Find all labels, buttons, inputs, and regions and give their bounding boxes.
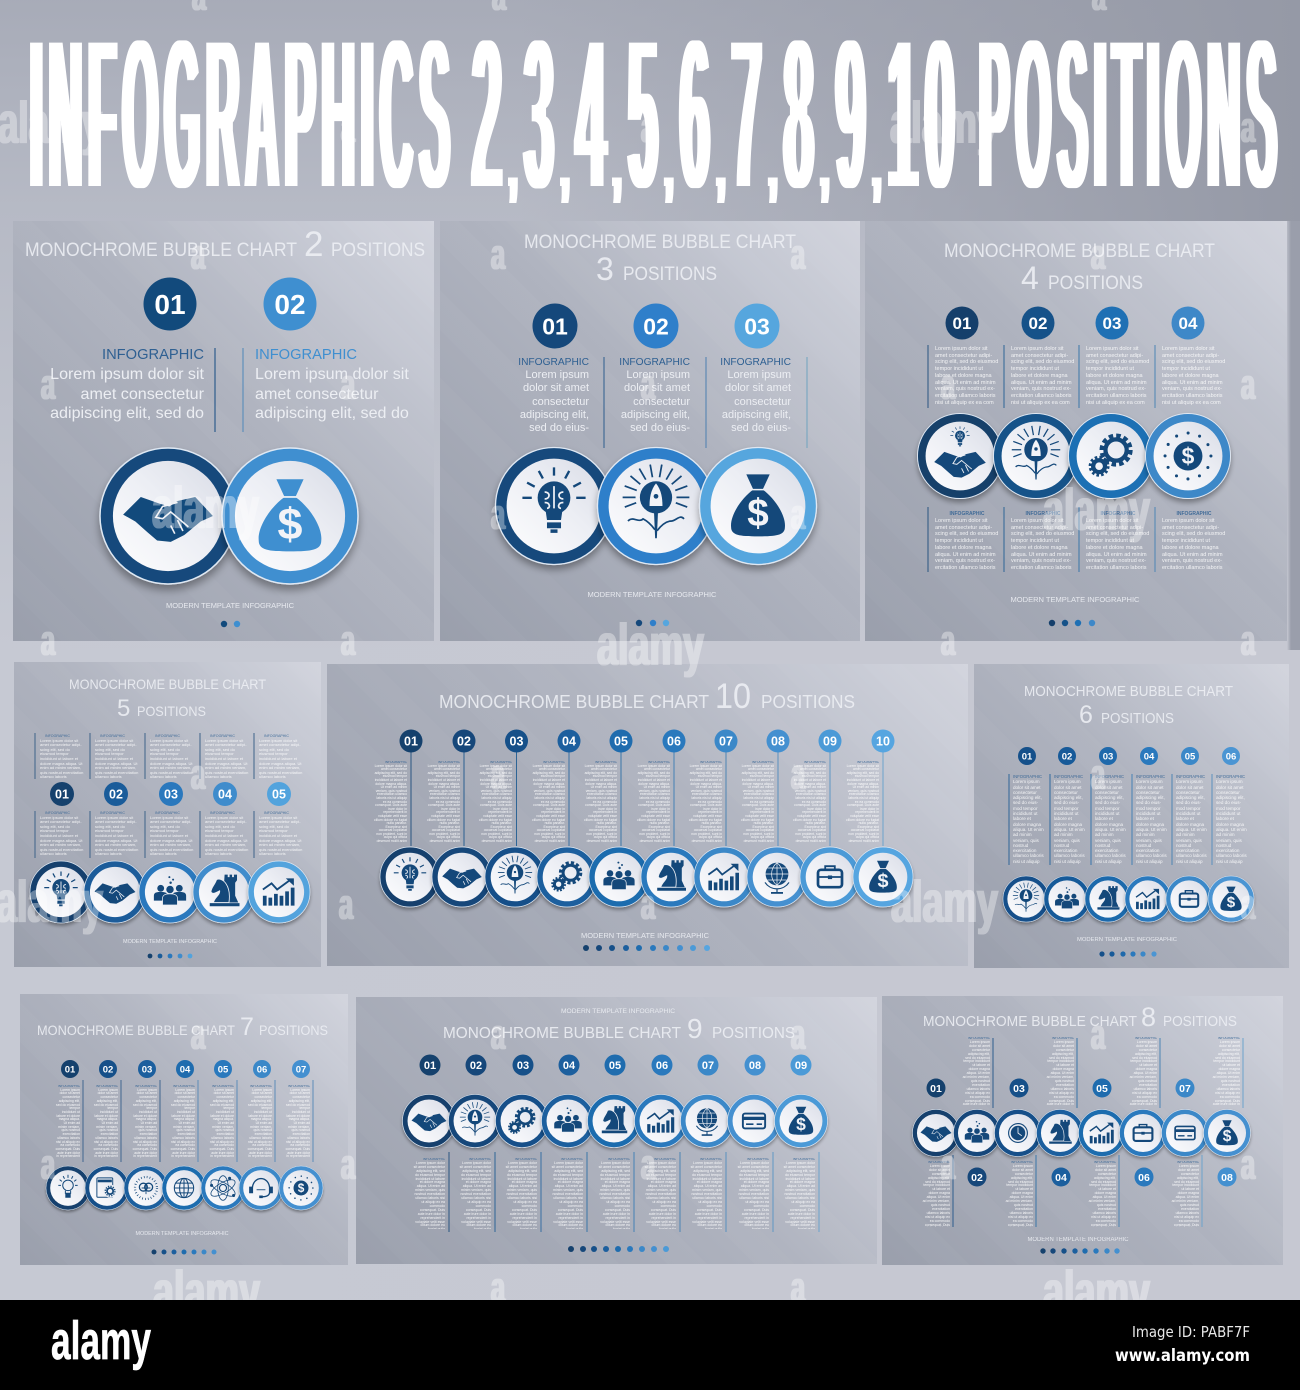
pagination dots — [1049, 620, 1095, 626]
footer caption: MODERN TEMPLATE INFOGRAPHIC — [1077, 937, 1177, 943]
number badges: 01 — [154, 289, 186, 320]
heading: MONOCHROME BUBBLE CHART — [25, 240, 297, 261]
heading — [923, 1002, 1237, 1032]
number badges: 03 — [1103, 314, 1121, 333]
watermarks: alamy — [152, 475, 259, 541]
watermarks: a — [491, 750, 505, 799]
number badges: 04 — [1179, 314, 1198, 333]
number badges: 04 — [218, 788, 232, 802]
text column 04: Lorem ipsum dolor sit amet consectetur adipiscing elit, sed do eiusmod tempor incididunt ut labore et dolore magna aliqua. Ut enim ad minim veniam, quis nostrud exercitation ullamco laboris nisi ut aliquip ex ea commodo consequat. Duis aute irure dolor in reprehenderit in voluptate velit esse cillum dolore eu fugiat nulla pariatur. Excepteur sint occaecat cupidatat non proident, sunt in culpa qui officia deserunt mollit anim — [532, 764, 565, 842]
number badges: 05 — [614, 734, 628, 748]
lower text 03: INFOGRAPHIC — [155, 811, 180, 815]
watermarks: a — [1241, 360, 1255, 409]
heading: 10 — [715, 677, 751, 716]
heading: POSITIONS — [761, 692, 855, 712]
text block 03 — [720, 357, 791, 434]
number badges: 02 — [103, 1064, 113, 1075]
number badges — [532, 304, 780, 348]
heading: POSITIONS — [331, 240, 425, 261]
number badges: 04 — [563, 1060, 576, 1072]
number badges: 01 — [542, 313, 568, 339]
heading: 3 — [596, 251, 614, 287]
text column 05: Lorem ipsum dolor sit amet consectetur adipiscing elit, sed do eiusmod tempor incididunt ut labore et dolore magna aliqua. Ut enim ad minim veniam, quis nostrud exercitation ullamco laboris nisi ut aliquip ex ea commodo consequat. Duis aute irure dolor in reprehenderit — [210, 1088, 234, 1158]
text block 02 — [619, 357, 690, 434]
bubbles — [100, 448, 358, 584]
watermarks: a — [1241, 103, 1255, 152]
footer caption: MODERN TEMPLATE INFOGRAPHIC — [1028, 1237, 1129, 1243]
number badges: 07 — [296, 1064, 306, 1075]
bubbles — [30, 861, 310, 923]
number badges: 01 — [1022, 751, 1033, 762]
lower text 01: INFOGRAPHIC — [45, 811, 70, 815]
text column 09: Lorem ipsum dolor sit amet consectetur adipiscing elit, sed do eiusmod tempor incididunt ut labore et dolore magna aliqua. Ut enim ad minim veniam, quis nostrud exercitation ullamco laboris nisi ut aliquip ex ea commodo consequat. Duis aute irure dolor in reprehenderit in voluptate velit esse cillum dolore eu fugiat nulla pariatur. Excepteur sint occaecat cupidatat non proident, sunt in culpa qui officia deserunt mollit anim — [793, 764, 826, 842]
text block 01: consectetur — [532, 396, 589, 408]
panel: 7 positions — [20, 994, 348, 1265]
watermarks: alamy — [0, 90, 102, 156]
image id: Image ID: PABF7F — [1132, 1323, 1250, 1341]
number badges: 02 — [457, 734, 471, 748]
bubbles — [380, 847, 913, 907]
text block 03: sed do eius- — [731, 422, 791, 434]
heading: 5 — [117, 695, 130, 722]
alamy logo: alamy — [51, 1311, 151, 1371]
text column 06: Lorem ipsum dolor sit amet consectetur adipiscing elit, sed do eiusmod tempor incididunt ut labore et dolore magna aliqua. Ut enim ad minim veniam, quis nostrud exercitation ullamco laboris nisi ut aliquip ex ea commodo consequat. Duis aute irure dolor in reprehenderit in voluptate velit esse cillum dolore eu fugiat nulla pariatur. Excepteur sint occaecat cupidatat non proident, sunt in culpa qui officia deserunt mollit anim — [637, 764, 670, 842]
heading — [1024, 684, 1233, 729]
footer caption: MODERN TEMPLATE INFOGRAPHIC — [1010, 595, 1140, 604]
text block 02 — [255, 347, 409, 422]
upper text 03: Lorem ipsum dolor sit amet consectetur adipi-scing elit, sed do eiusmod tempor incididunt ut labore et dolore magna aliqua. Ut enim ad minim veniam, quis nostrud ex-ercitation ullamco laboris nisi ut aliquip ex ea com — [1086, 346, 1149, 406]
text column 02: INFOGRAPHIC — [1054, 774, 1083, 779]
number badges: 01 — [55, 788, 69, 802]
number badges — [946, 306, 1204, 340]
heading: 7 — [240, 1013, 254, 1041]
text column 05: Lorem ipsum dolor sit amet consectetur adipiscing elit, sed do eiusmod tempor incididunt ut labore et dolore magna aliqua. Ut enim ad minim veniam, quis nostrud exercitation ullamco laboris nisi ut aliquip ex ea commodo consequat. Duis aute irure dolor in reprehenderit in voluptate velit esse cillum dolore eu fugiat nulla pariatur. Excepteur sint occaecat cupidatat non proident, sunt in culpa qui officia deserunt mollit anim — [584, 764, 617, 842]
watermarks: a — [191, 1010, 205, 1059]
heading: 4 — [1021, 260, 1039, 296]
heading: POSITIONS — [1048, 273, 1143, 294]
watermarks: a — [41, 616, 55, 665]
text block 01: adipiscing elit, sed do — [50, 404, 204, 422]
lower text 03: Lorem ipsum dolor sit amet consectetur adipi-scing elit, sed do eiusmod tempor incididunt ut labore et dolore magna aliqua. Ut enim ad minim veniam, quis nostrud ex-ercitation ullamco laboris — [1086, 518, 1149, 571]
watermarks: a — [941, 616, 955, 665]
number badges: 03 — [744, 313, 770, 339]
heading: POSITIONS — [1163, 1013, 1237, 1030]
number badges — [61, 1060, 310, 1078]
pagination dots — [568, 1246, 669, 1252]
number badges: 07 — [702, 1060, 714, 1072]
text block 03: adipiscing elit, — [722, 409, 791, 421]
watermarks: a — [791, 750, 805, 799]
bubbles — [496, 448, 816, 564]
number badges: 02 — [643, 313, 669, 339]
number badges: 08 — [749, 1060, 761, 1072]
upper text 01: INFOGRAPHIC — [45, 734, 70, 738]
heading: POSITIONS — [712, 1025, 795, 1042]
text block 01: sed do eius- — [529, 422, 589, 434]
pagination dots — [583, 945, 710, 951]
text column 05: INFOGRAPHIC — [1176, 774, 1205, 779]
panel: 4 positions — [865, 221, 1287, 641]
lower text 05: INFOGRAPHIC — [264, 811, 289, 815]
website: www.alamy.com — [1115, 1346, 1250, 1366]
number badges: 09 — [823, 734, 837, 748]
number badges: 02 — [971, 1172, 983, 1184]
footer caption: MODERN TEMPLATE INFOGRAPHIC — [561, 1008, 676, 1015]
text block 03: dolor sit amet — [725, 382, 791, 394]
text column 03: Lorem ipsum dolor sit amet consectetur adipiscing elit, sed do eiusmod tempor incididunt ut labore et dolore magna aliqua. Ut enim ad minim veniam, quis nostrud exercitation ullamco laboris nisi ut aliquip ex ea commodo consequat. Duis aute irure dolor in reprehenderit in voluptate velit esse cillum dolore eu fugiat nulla pariatur. Excepteur sint occaecat cupidatat non proident, sunt in culpa qui officia deserunt mollit anim — [479, 764, 512, 842]
watermarks: alamy — [890, 90, 998, 156]
heading: MONOCHROME BUBBLE CHART — [37, 1022, 235, 1038]
lower text 04: INFOGRAPHIC — [210, 811, 235, 815]
lower text 04: INFOGRAPHIC — [1176, 511, 1212, 517]
panel: 3 positions — [440, 221, 860, 641]
heading — [439, 677, 855, 716]
text block 02: consectetur — [633, 396, 690, 408]
number badges: 06 — [656, 1060, 668, 1072]
panel: 10 positions — [327, 664, 968, 966]
text column 06: INFOGRAPHIC — [1216, 774, 1245, 779]
pagination dots — [1099, 951, 1157, 957]
footer caption: MODERN TEMPLATE INFOGRAPHIC — [581, 933, 709, 940]
footer caption: MODERN TEMPLATE INFOGRAPHIC — [166, 601, 295, 610]
number badges — [144, 278, 316, 330]
text column 01: Lorem ipsum dolor sit amet consectetur adipiscing elit, sed do eiusmod tempor incididunt ut labore et dolore magna aliqua. Ut enim ad minim veniam, quis nostrud exercitation ullamco laboris nisi ut aliquip ex ea commodo consequat. Duis aute irure dolor in reprehenderit — [56, 1088, 80, 1158]
number badges: 02 — [1062, 751, 1072, 762]
lower text 01: Lorem ipsum dolor sit amet consectetur adipi-scing elit, sed do eiusmod tempor incididunt ut labore et dolore magna aliqua. Ut enim ad minim veniam, quis nostrud ex-ercitation ullamco laboris — [935, 518, 998, 571]
watermarks: alamy — [597, 612, 704, 678]
text column 08: Lorem ipsum dolor sit amet consectetur adipiscing elit, sed do eiusmod tempor incididunt ut labore et dolore magna aliqua. Ut enim ad minim veniam, quis nostrud exercitation ullamco laboris nisi ut aliquip ex ea commodo consequat. Duis aute irure dolor in reprehenderit in voluptate velit esse cillum dolore eu fugiat nulla pariatur. Excepteur sint occaecat cupidatat non proident, sunt in culpa qui officia deserunt mollit anim — [741, 764, 774, 842]
watermarks: a — [641, 360, 655, 409]
watermarks: a — [641, 880, 655, 929]
heading: POSITIONS — [137, 703, 206, 719]
text column 03: Lorem ipsum dolor sit amet consectetur adipiscing elit, sed do eiusmod tempor incididunt ut labore et dolore magna aliqua. Ut enim ad minim veniam, quis nostrud exercitation ullamco laboris nisi ut aliquip ex ea commodo consequat. Duis aute irure dolor in reprehenderit — [133, 1088, 157, 1158]
number badges: 06 — [257, 1064, 267, 1075]
text block 02: dolor sit amet — [624, 382, 690, 394]
watermarks: a — [1091, 750, 1105, 799]
watermarks: a — [41, 360, 55, 409]
pagination dots — [152, 1250, 216, 1254]
text column 04: Lorem ipsum dolor sit amet consectetur adipiscing elit, sed do eiusmod tempor incididunt ut labore et dolore magna aliqua. Ut enim ad minim veniam, quis nostrud exercitation ullamco laboris nisi ut aliquip ex ea commodo consequat. Duis aute irure dolor in reprehenderit — [171, 1088, 195, 1158]
heading — [25, 225, 425, 264]
number badges: 07 — [1179, 1083, 1191, 1095]
number badges: 04 — [180, 1064, 191, 1075]
heading: MONOCHROME BUBBLE CHART — [69, 676, 266, 692]
number badges: 01 — [930, 1083, 942, 1095]
pagination dots — [148, 954, 192, 958]
watermarks: a — [1241, 1140, 1255, 1189]
upper text 05: INFOGRAPHIC — [264, 734, 289, 738]
number badges: 03 — [142, 1064, 152, 1075]
text column 07: Lorem ipsum dolor sit amet consectetur adipiscing elit, sed do eiusmod tempor incididunt ut labore et dolore magna aliqua. Ut enim ad minim veniam, quis nostrud exercitation ullamco laboris nisi ut aliquip ex ea commodo consequat. Duis aute irure dolor in reprehenderit in voluptate velit esse cillum dolore eu fugiat nulla pariatur. Excepteur sint occaecat cupidatat non proident, sunt in culpa qui officia deserunt mollit anim — [689, 764, 722, 842]
watermarks: a — [941, 360, 955, 409]
text block 02: INFOGRAPHIC — [619, 357, 690, 368]
number badges: 05 — [272, 788, 286, 802]
text column 01: INFOGRAPHIC — [1013, 774, 1042, 779]
number badges: 01 — [953, 314, 971, 333]
text block 03: Lorem ipsum — [727, 369, 791, 381]
heading: MONOCHROME BUBBLE CHART — [439, 692, 709, 712]
watermarks: a — [1091, 230, 1105, 279]
text block 02: Lorem ipsum — [626, 369, 690, 381]
heading: MONOCHROME BUBBLE CHART — [443, 1025, 681, 1042]
watermarks: a — [1241, 616, 1255, 665]
watermarks: alamy — [0, 869, 103, 935]
panel: 6 positions — [974, 664, 1289, 968]
footer caption: MODERN TEMPLATE INFOGRAPHIC — [136, 1231, 228, 1237]
heading — [944, 241, 1215, 296]
heading — [443, 1013, 795, 1044]
number badges: 05 — [218, 1064, 229, 1075]
upper text 02: INFOGRAPHIC — [100, 734, 125, 738]
bubbles — [918, 414, 1230, 498]
number badges — [1018, 747, 1240, 765]
bubbles — [912, 1110, 1250, 1156]
lower text 01: INFOGRAPHIC — [950, 511, 984, 517]
watermarks: a — [341, 360, 355, 409]
lower text 02: Lorem ipsum dolor sit amet consectetur adipi-scing elit, sed do eiusmod tempor incididunt ut labore et dolore magna aliqua. Ut enim ad minim veniam, quis nostrud ex-ercitation ullamco laboris — [1011, 518, 1074, 571]
footer bar — [0, 1300, 1300, 1390]
heading: MONOCHROME BUBBLE CHART — [524, 232, 796, 253]
text block 01: INFOGRAPHIC — [518, 357, 589, 368]
text column 03: INFOGRAPHIC — [1095, 774, 1124, 779]
heading — [69, 676, 266, 722]
number badges: 02 — [470, 1060, 482, 1072]
number badges: 02 — [274, 289, 306, 320]
upper text 04: Lorem ipsum dolor sit amet consectetur adipi-scing elit, sed do eiusmod tempor incididunt ut labore et dolore magna aliqua. Ut enim ad minim veniam, quis nostrud ex-ercitation ullamco laboris nisi ut aliquip ex ea com — [1162, 346, 1225, 406]
heading — [524, 232, 796, 287]
number badges — [420, 1054, 812, 1076]
number badges: 04 — [1055, 1172, 1067, 1184]
text block 02: adipiscing elit, sed do — [255, 404, 409, 422]
text block 01 — [50, 347, 204, 422]
watermarks: a — [41, 1140, 55, 1189]
lower text 02: INFOGRAPHIC — [100, 811, 125, 815]
watermarks: a — [791, 230, 805, 279]
watermarks: a — [791, 1010, 805, 1059]
text block 01: Lorem ipsum — [525, 369, 589, 381]
number badges: 05 — [1096, 1083, 1108, 1095]
text block 03: consectetur — [734, 396, 791, 408]
number badges: 07 — [719, 734, 733, 748]
watermarks: a — [341, 1140, 355, 1189]
bubbles — [402, 1094, 828, 1148]
number badges: 03 — [510, 734, 523, 748]
watermarks: a — [191, 750, 205, 799]
watermarks: a — [491, 230, 505, 279]
number badges: 02 — [109, 788, 123, 802]
text column 02: Lorem ipsum dolor sit amet consectetur adipiscing elit, sed do eiusmod tempor incididunt ut labore et dolore magna aliqua. Ut enim ad minim veniam, quis nostrud exercitation ullamco laboris nisi ut aliquip ex ea commodo consequat. Duis aute irure dolor in reprehenderit in voluptate velit esse cillum dolore eu fugiat nulla pariatur. Excepteur sint occaecat cupidatat non proident, sunt in culpa qui officia deserunt mollit anim — [427, 764, 460, 842]
watermarks: a — [941, 1140, 955, 1189]
number badges: 03 — [517, 1060, 529, 1072]
number badges: 05 — [609, 1060, 621, 1072]
text block 01: dolor sit amet — [523, 382, 589, 394]
number badges: 01 — [65, 1064, 76, 1075]
bubbles — [1003, 876, 1254, 922]
text block 02: Lorem ipsum dolor sit — [255, 365, 409, 383]
heading: 8 — [1141, 1002, 1156, 1032]
heading: MONOCHROME BUBBLE CHART — [1024, 684, 1233, 700]
upper text 02: Lorem ipsum dolor sit amet consectetur adipi-scing elit, sed do eiusmod tempor incididunt ut labore et dolore magna aliqua. Ut enim ad minim veniam, quis nostrud ex-ercitation ullamco laboris nisi ut aliquip ex ea com — [1011, 346, 1074, 406]
watermarks: a — [191, 230, 205, 279]
number badges: 04 — [562, 734, 576, 748]
heading: MONOCHROME BUBBLE CHART — [944, 241, 1215, 262]
bubbles — [46, 1166, 323, 1210]
panel: 5 positions — [14, 662, 321, 967]
watermarks: a — [339, 880, 353, 929]
heading: 9 — [687, 1013, 703, 1044]
text block 01: adipiscing elit, — [520, 409, 589, 421]
text block 01: INFOGRAPHIC — [102, 347, 204, 363]
number badges: 08 — [771, 734, 785, 748]
watermarks: a — [491, 1010, 505, 1059]
number badges: 03 — [1103, 751, 1113, 762]
heading: 6 — [1079, 701, 1093, 729]
panel: 2 positions — [13, 221, 434, 641]
number badges: 01 — [424, 1060, 436, 1072]
number badges: 02 — [1029, 314, 1047, 333]
watermarks: a — [791, 490, 805, 539]
text block 02: adipiscing elit, — [621, 409, 690, 421]
number badges — [926, 1078, 1236, 1186]
watermarks: alamy — [1043, 477, 1150, 543]
text column 10: Lorem ipsum dolor sit amet consectetur adipiscing elit, sed do eiusmod tempor incididunt ut labore et dolore magna aliqua. Ut enim ad minim veniam, quis nostrud exercitation ullamco laboris nisi ut aliquip ex ea commodo consequat. Duis aute irure dolor in reprehenderit in voluptate velit esse cillum dolore eu fugiat nulla pariatur. Excepteur sint occaecat cupidatat non proident, sunt in culpa qui officia deserunt mollit anim — [846, 764, 879, 842]
heading: 2 — [304, 225, 323, 264]
heading: POSITIONS — [1101, 711, 1174, 727]
pagination dots — [636, 620, 669, 626]
text block 03: INFOGRAPHIC — [720, 357, 791, 368]
text block 01: amet consectetur — [81, 384, 204, 402]
number badges: 03 — [164, 788, 178, 802]
lower text 02: INFOGRAPHIC — [1026, 511, 1060, 517]
text block 02: INFOGRAPHIC — [255, 347, 357, 363]
footer caption: MODERN TEMPLATE INFOGRAPHIC — [123, 939, 217, 945]
text block 02: amet consectetur — [255, 384, 378, 402]
number badges: 06 — [667, 734, 681, 748]
heading: MONOCHROME BUBBLE CHART — [923, 1013, 1137, 1030]
footer caption: MODERN TEMPLATE INFOGRAPHIC — [588, 590, 717, 599]
upper text 03: INFOGRAPHIC — [155, 734, 180, 738]
heading — [37, 1013, 328, 1041]
watermarks: a — [1091, 1010, 1105, 1059]
heading: POSITIONS — [623, 264, 717, 285]
number badges — [50, 782, 291, 806]
watermarks: a — [341, 616, 355, 665]
number badges: 01 — [404, 734, 418, 748]
panel: 8 positions — [882, 996, 1283, 1265]
text block 02: sed do eius- — [630, 422, 690, 434]
text column 06: Lorem ipsum dolor sit amet consectetur adipiscing elit, sed do eiusmod tempor incididunt ut labore et dolore magna aliqua. Ut enim ad minim veniam, quis nostrud exercitation ullamco laboris nisi ut aliquip ex ea commodo consequat. Duis aute irure dolor in reprehenderit — [248, 1088, 272, 1158]
text column 01: Lorem ipsum dolor sit amet consectetur adipiscing elit, sed do eiusmod tempor incididunt ut labore et dolore magna aliqua. Ut enim ad minim veniam, quis nostrud exercitation ullamco laboris nisi ut aliquip ex ea commodo consequat. Duis aute irure dolor in reprehenderit in voluptate velit esse cillum dolore eu fugiat nulla pariatur. Excepteur sint occaecat cupidatat non proident, sunt in culpa qui officia deserunt mollit anim — [374, 764, 407, 842]
watermarks: alamy — [891, 869, 998, 935]
number badges: 06 — [1226, 751, 1236, 762]
watermarks: a — [641, 103, 655, 152]
watermarks: a — [341, 103, 355, 152]
pagination dots — [1040, 1248, 1120, 1254]
text column 07: Lorem ipsum dolor sit amet consectetur adipiscing elit, sed do eiusmod tempor incididunt ut labore et dolore magna aliqua. Ut enim ad minim veniam, quis nostrud exercitation ullamco laboris nisi ut aliquip ex ea commodo consequat. Duis aute irure dolor in reprehenderit — [286, 1088, 310, 1158]
panel: 9 positions — [356, 997, 877, 1264]
number badges: 09 — [795, 1060, 807, 1072]
upper text 04: INFOGRAPHIC — [210, 734, 235, 738]
text column 04: INFOGRAPHIC — [1136, 774, 1165, 779]
watermarks: a — [641, 1140, 655, 1189]
number badges: 04 — [1144, 751, 1155, 762]
heading: POSITIONS — [259, 1022, 328, 1038]
number badges: 06 — [1138, 1172, 1150, 1184]
text block 01: Lorem ipsum dolor sit — [50, 365, 204, 383]
watermarks: a — [1241, 880, 1255, 929]
number badges: 10 — [876, 734, 890, 748]
pagination dots — [221, 621, 240, 627]
watermarks: a — [491, 490, 505, 539]
lower text 04: Lorem ipsum dolor sit amet consectetur adipi-scing elit, sed do eiusmod tempor incididunt ut labore et dolore magna aliqua. Ut enim ad minim veniam, quis nostrud ex-ercitation ullamco laboris — [1162, 518, 1225, 571]
upper text 01: Lorem ipsum dolor sit amet consectetur adipi-scing elit, sed do eiusmod tempor incididunt ut labore et dolore magna aliqua. Ut enim ad minim veniam, quis nostrud ex-ercitation ullamco laboris nisi ut aliquip ex ea com — [935, 346, 998, 406]
text block 01 — [518, 357, 589, 434]
number badges: 05 — [1185, 751, 1196, 762]
number badges: 08 — [1221, 1172, 1233, 1184]
number badges: 03 — [1013, 1083, 1025, 1095]
text column 02: Lorem ipsum dolor sit amet consectetur adipiscing elit, sed do eiusmod tempor incididunt ut labore et dolore magna aliqua. Ut enim ad minim veniam, quis nostrud exercitation ullamco laboris nisi ut aliquip ex ea commodo consequat. Duis aute irure dolor in reprehenderit — [94, 1088, 118, 1158]
number badges — [400, 730, 894, 752]
lower text 03: INFOGRAPHIC — [1100, 511, 1136, 517]
